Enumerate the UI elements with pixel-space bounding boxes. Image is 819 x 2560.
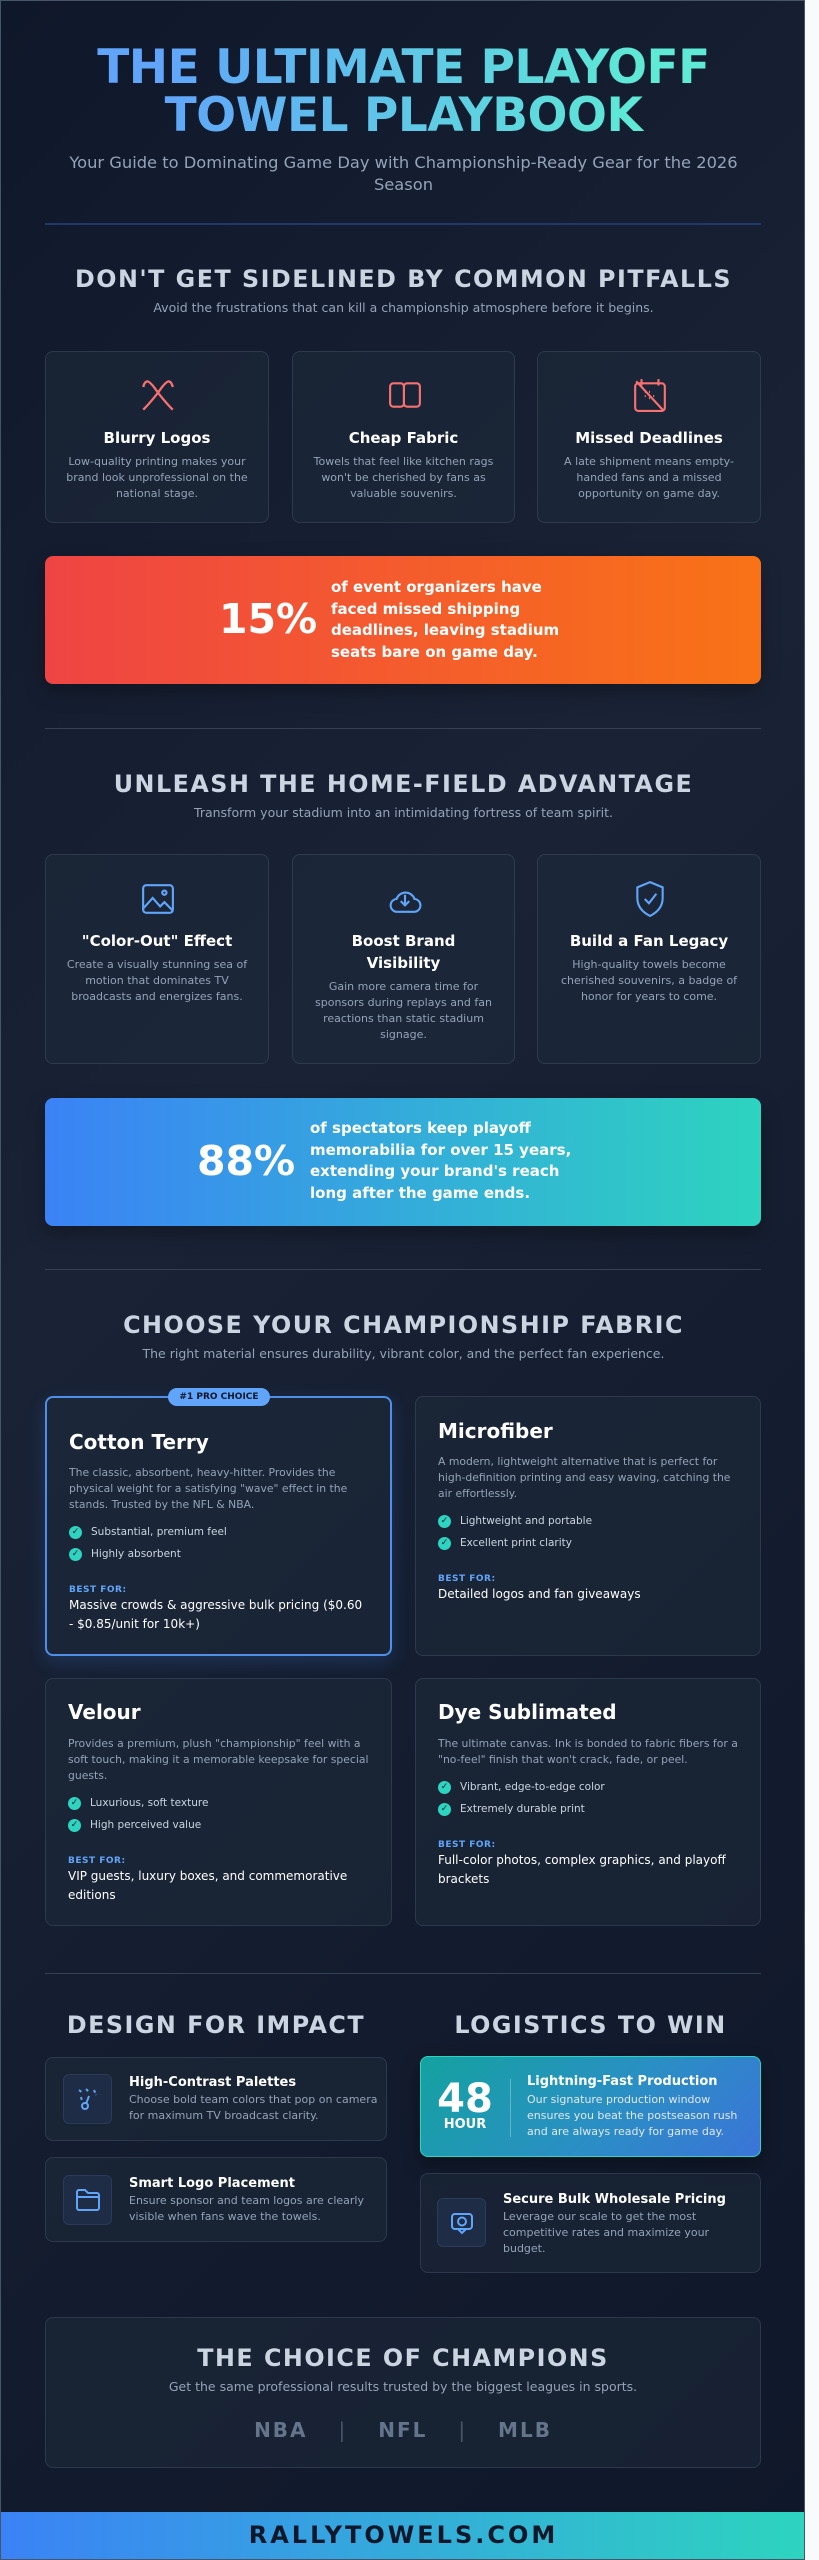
subheading: pitfalls: Avoid the frustrations that can kill a championship atmosphere before it begins. xyxy=(153,300,654,315)
league logos: NBA | NFL | MLB xyxy=(254,2418,552,2442)
badge xyxy=(168,1388,270,1406)
title xyxy=(1,44,806,140)
title: Secure Bulk Wholesale Pricing xyxy=(503,2192,726,2207)
fabric text: The classic, absorbent, heavy-hitter. Provides the physical weight for a satisfying "wave" effect in the stands. Trusted by the NFL & NBA. xyxy=(69,1466,347,1511)
title: Cheap Fabric xyxy=(349,429,458,447)
stat number: 88% xyxy=(197,1137,295,1185)
panel: brand visibility xyxy=(292,854,515,1064)
stat: 48: 48 xyxy=(437,2076,493,2122)
stat banner: 15% xyxy=(45,556,761,684)
panel: dye sublimated xyxy=(415,1678,761,1926)
fabric text: The ultimate canvas. Ink is bonded to fabric fibers for a "no-feel" finish that won't crack, fade, or peel. xyxy=(438,1737,738,1766)
heading: fabric: CHOOSE YOUR CHAMPIONSHIP FABRIC xyxy=(123,1311,684,1339)
title: Boost Brand xyxy=(352,932,455,950)
text: Ensure sponsor and team logos are clearly visible when fans wave the towels. xyxy=(129,2194,364,2223)
icon: image xyxy=(142,884,174,914)
fabric title: Velour xyxy=(68,1700,141,1724)
best for text: Full-color photos, complex graphics, and playoff brackets xyxy=(438,1853,726,1886)
text: Towels that feel like kitchen rags won't be cherished by fans as valuable souvenirs. xyxy=(314,455,493,500)
panel: fan legacy xyxy=(537,854,761,1064)
fabric title: Microfiber xyxy=(438,1419,553,1443)
best for text: Detailed logos and fan giveaways xyxy=(438,1587,641,1601)
best for: BEST FOR: xyxy=(438,1840,496,1850)
heading: THE CHOICE OF CHAMPIONS xyxy=(197,2344,609,2372)
fabric title: Cotton Terry xyxy=(69,1430,209,1454)
best for text: VIP guests, luxury boxes, and commemorative editions xyxy=(68,1869,347,1902)
panel: 48 hour production xyxy=(420,2056,761,2157)
icon: brush xyxy=(63,2074,112,2124)
panel: missed deadlines xyxy=(537,351,761,523)
stat label: HOUR xyxy=(444,2117,486,2132)
stat text: of event organizers have faced missed shipping deadlines, leaving stadium seats bare on game day. xyxy=(331,578,559,660)
check: Highly absorbent xyxy=(91,1548,181,1560)
panel: choice of champions xyxy=(45,2317,761,2468)
title: TOWEL PLAYBOOK xyxy=(165,88,642,143)
check: Excellent print clarity xyxy=(460,1537,572,1549)
panel: cotton terry xyxy=(45,1396,392,1656)
subtitle: Your Guide to Dominating Game Day with Championship-Ready Gear for the 2026 Season xyxy=(69,153,738,194)
panel: microfiber xyxy=(415,1396,761,1656)
text: Our signature production window ensures you beat the postseason rush and are always ready for game day. xyxy=(527,2093,737,2138)
title: "Color-Out" Effect xyxy=(82,932,232,950)
heading: pitfalls: DON'T GET SIDELINED BY COMMON PITFALLS xyxy=(75,265,732,293)
stat text: of spectators keep playoff memorabilia for over 15 years, extending your brand's reach long after the game ends. xyxy=(310,1119,571,1202)
subheading: Get the same professional results trusted by the biggest leagues in sports. xyxy=(169,2379,637,2394)
title: Build a Fan Legacy xyxy=(570,932,728,950)
stat banner: 88% xyxy=(45,1098,761,1226)
fabric title: Dye Sublimated xyxy=(438,1700,617,1724)
check: Extremely durable print xyxy=(460,1803,585,1815)
panel: logo placement xyxy=(45,2157,387,2242)
icon: blurry xyxy=(142,380,174,410)
best for: BEST FOR: xyxy=(438,1574,496,1584)
icon: shield xyxy=(636,881,664,918)
check: Lightweight and portable xyxy=(460,1515,592,1527)
stat number: 15% xyxy=(219,595,317,643)
title: Smart Logo Placement xyxy=(129,2176,295,2191)
fabric text: Provides a premium, plush "championship" feel with a soft touch, making it a memorable keepsake for special guests. xyxy=(68,1737,368,1782)
subheading: advantage: Transform your stadium into an intimidating fortress of team spirit. xyxy=(194,805,613,820)
panel: color-out xyxy=(45,854,269,1064)
title: Visibility xyxy=(367,954,440,972)
check: High perceived value xyxy=(90,1819,201,1831)
heading: advantage: UNLEASH THE HOME-FIELD ADVANTAGE xyxy=(114,770,693,798)
text: Gain more camera time for sponsors during replays and fan reactions than static stadium signage. xyxy=(315,980,492,1041)
text: A late shipment means empty-handed fans and a missed opportunity on game day. xyxy=(564,455,734,500)
title: Missed Deadlines xyxy=(575,429,723,447)
title: Blurry Logos xyxy=(104,429,210,447)
text: Leverage our scale to get the most competitive rates and maximize your budget. xyxy=(503,2210,709,2255)
check: Substantial, premium feel xyxy=(91,1526,227,1538)
title: High-Contrast Palettes xyxy=(129,2075,296,2090)
best for: BEST FOR: xyxy=(68,1856,126,1866)
title: THE ULTIMATE PLAYOFF xyxy=(97,40,710,95)
check: Luxurious, soft texture xyxy=(90,1797,208,1809)
panel: velour xyxy=(45,1678,392,1926)
title xyxy=(352,932,455,972)
icon: cloud download xyxy=(390,892,422,913)
footer: RALLYTOWELS.COM xyxy=(249,2521,558,2549)
best for: BEST FOR: xyxy=(69,1585,127,1595)
panel: high-contrast xyxy=(45,2057,387,2141)
subheading: fabric: The right material ensures durability, vibrant color, and the perfect fan experience. xyxy=(142,1346,664,1361)
panel: cheap fabric xyxy=(292,351,515,523)
fabric text: A modern, lightweight alternative that is perfect for high-definition printing and easy waving, catching the air effortlessly. xyxy=(438,1455,730,1500)
text: Low-quality printing makes your brand look unprofessional on the national stage. xyxy=(66,455,248,500)
icon: folder xyxy=(63,2175,112,2225)
check: Vibrant, edge-to-edge color xyxy=(460,1781,605,1793)
text: High-quality towels become cherished souvenirs, a badge of honor for years to come. xyxy=(561,958,737,1003)
footer xyxy=(1,2512,806,2560)
panel: bulk pricing xyxy=(420,2173,761,2273)
icon: fabric xyxy=(389,382,421,408)
icon: calendar xyxy=(634,379,666,412)
icon: coin xyxy=(437,2198,486,2247)
heading: logistics: LOGISTICS TO WIN xyxy=(454,2011,727,2039)
text: Create a visually stunning sea of motion that dominates TV broadcasts and energizes fans. xyxy=(67,958,247,1003)
heading: design: DESIGN FOR IMPACT xyxy=(67,2011,365,2039)
badge: #1 PRO CHOICE xyxy=(179,1392,259,1402)
text: Choose bold team colors that pop on camera for maximum TV broadcast clarity. xyxy=(129,2093,377,2122)
panel: blurry logos xyxy=(45,351,269,523)
best for text: Massive crowds & aggressive bulk pricing ($0.60 - $0.85/unit for 10k+) xyxy=(69,1598,362,1631)
title: Lightning-Fast Production xyxy=(527,2074,718,2089)
